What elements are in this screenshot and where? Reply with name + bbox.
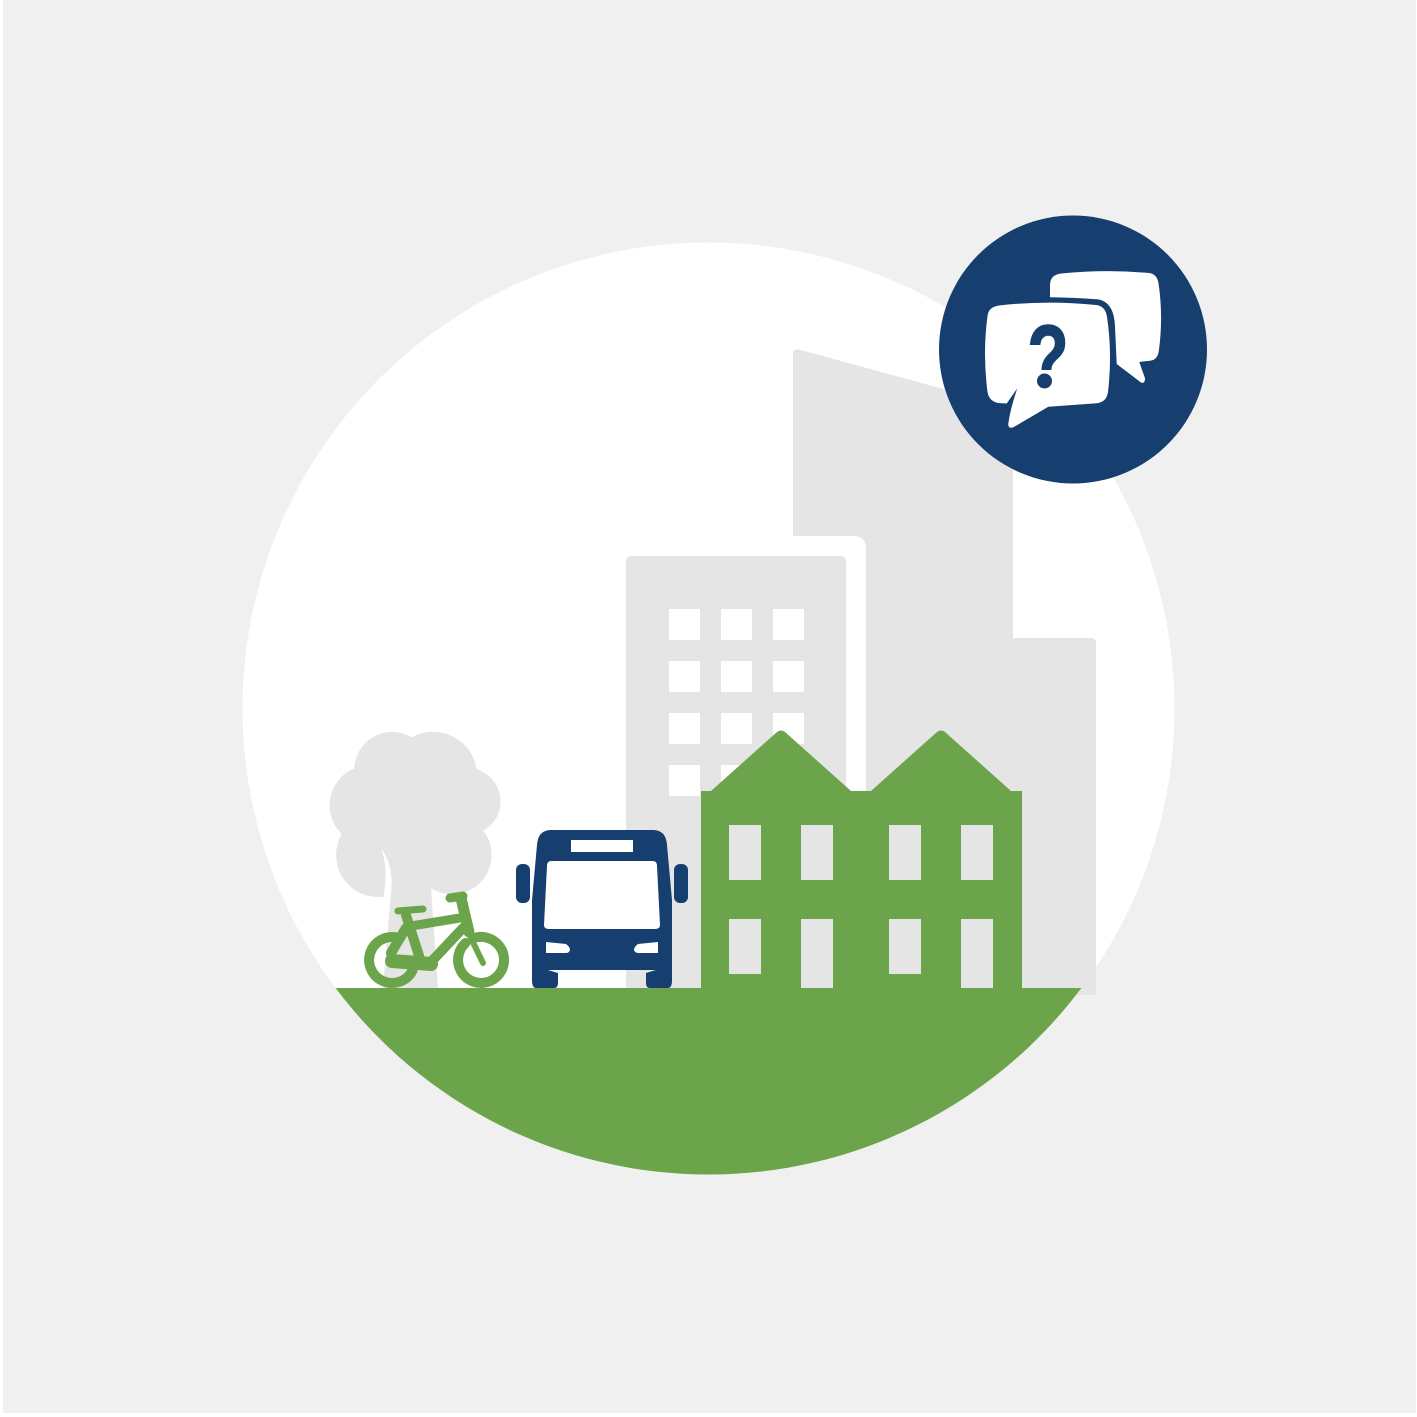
bus headlights [546,942,570,953]
green terraced houses [701,730,1022,990]
grey tree [330,732,501,988]
bus sign [571,840,633,852]
bus body [532,830,672,988]
green ground [336,988,1081,1175]
front speech bubble [985,303,1110,428]
bus mirrors [516,864,688,903]
back speech bubble [1050,271,1161,383]
white circle scene [242,242,1174,1174]
mid-rise grey building [626,556,846,988]
green bicycle [369,896,504,983]
chat icon badge [939,216,1207,484]
bus windshield [544,861,660,929]
question mark: ? [1027,307,1069,407]
blue bus [516,830,688,988]
tall grey skyscraper [793,349,1096,995]
question mark round dot [1036,371,1054,391]
